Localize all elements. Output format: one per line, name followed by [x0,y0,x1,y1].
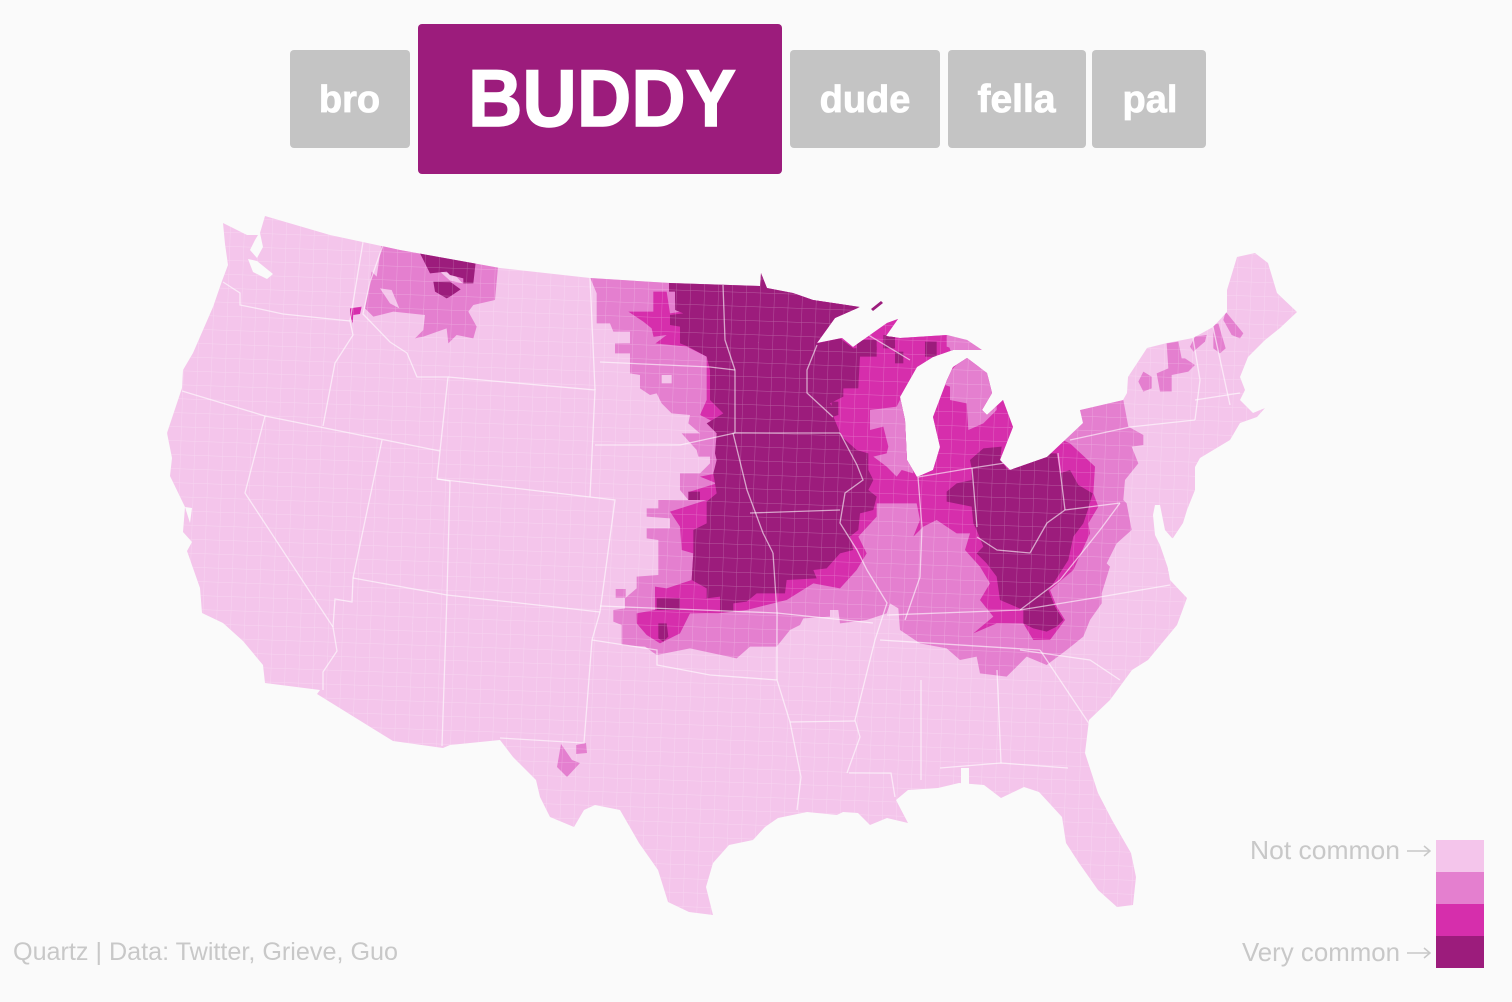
button: bro [290,50,410,148]
legend swatches [1436,840,1484,968]
region: somewhat common, west Texas [557,743,587,777]
button: dude [790,50,940,148]
state borders [182,242,1240,810]
inland water: Puget Sound [248,259,273,279]
choropleth map of the United States [150,200,1320,930]
button: dude: dude [820,79,910,121]
region: somewhat common, central and eastern [580,253,1143,677]
region: very common, upper Midwest and Plains [669,270,877,612]
legend arrow: not common [1407,846,1430,856]
button: fella: fella [977,78,1056,121]
region: somewhat common, Montana [365,243,498,343]
county grid texture [150,200,1320,930]
button: bro: bro [319,79,380,121]
region: very common, Ohio valley and Appalachia [657,335,1093,642]
legend label: very common: Very common [1242,937,1400,967]
button: fella [948,50,1086,148]
Isle Royale [871,301,883,311]
region: very common, Montana [420,254,476,298]
region: somewhat common, northern New York, Vermont and Maine [1138,312,1243,392]
region: common [628,292,1098,643]
inland water: Mobile Bay [961,768,969,785]
source credit: Quartz | Data: Twitter, Grieve, Guo [13,938,398,966]
base land: not common [150,200,1320,930]
inland water: Chesapeake Bay [1153,505,1172,580]
button: BUDDY (selected) [418,24,782,174]
region: common, Idaho county [350,307,362,323]
patches: somewhat common within the common band [630,335,997,477]
inland water: San Francisco Bay [185,507,192,523]
button: BUDDY (selected): BUDDY [468,54,736,144]
legend arrow: very common [1407,948,1430,958]
legend label: not common: Not common [1250,835,1400,865]
legend [1242,835,1484,968]
button: pal: pal [1123,79,1177,121]
button: pal [1092,50,1206,148]
